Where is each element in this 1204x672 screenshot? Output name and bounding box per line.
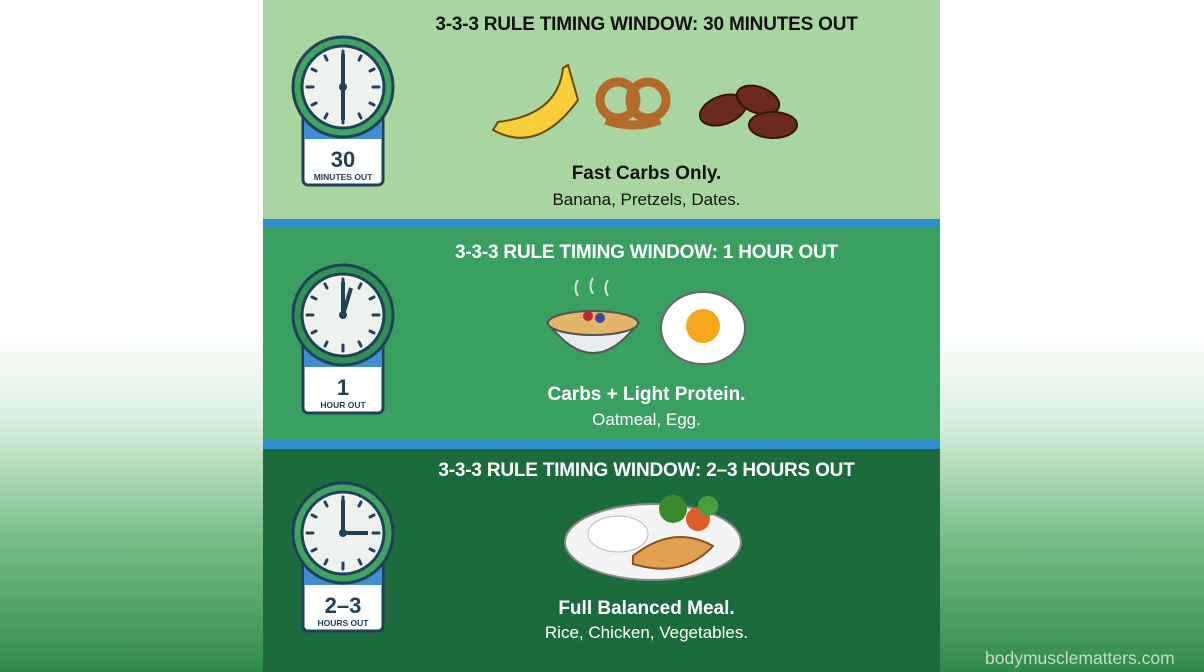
subtitle 3: Rice, Chicken, Vegetables. bbox=[545, 623, 748, 642]
clock icon 3: 2–3 bbox=[325, 593, 361, 618]
clock icon 3 bbox=[292, 482, 394, 632]
panel: 2-3 hours out bbox=[263, 449, 940, 672]
clock icon 1 bbox=[292, 36, 394, 186]
title 2: Carbs + Light Protein. bbox=[548, 384, 745, 405]
clock icon 3: HOURS OUT bbox=[318, 618, 369, 628]
clock icon 2: HOUR OUT bbox=[320, 400, 366, 410]
subtitle 2: Oatmeal, Egg. bbox=[592, 410, 701, 429]
heading 3: 3-3-3 RULE TIMING WINDOW: 2–3 HOURS OUT bbox=[438, 460, 855, 481]
heading 1: 3-3-3 RULE TIMING WINDOW: 30 MINUTES OUT bbox=[435, 14, 858, 35]
food icons: oatmeal, egg bbox=[546, 278, 746, 365]
food icons: banana, pretzels, dates bbox=[492, 64, 798, 139]
clock icon 2 bbox=[292, 264, 394, 414]
heading 2: 3-3-3 RULE TIMING WINDOW: 1 HOUR OUT bbox=[455, 242, 838, 263]
subtitle 1: Banana, Pretzels, Dates. bbox=[552, 190, 741, 209]
panel: 30 minutes out bbox=[263, 0, 940, 219]
food icon: plate meal bbox=[564, 495, 742, 581]
title 1: Fast Carbs Only. bbox=[572, 163, 721, 184]
clock icon 2: 1 bbox=[337, 375, 349, 400]
clock icon 1: 30 bbox=[331, 147, 355, 172]
clock icon 1: MINUTES OUT bbox=[314, 172, 373, 182]
watermark: bodymusclematters.com bbox=[985, 648, 1175, 668]
panel: 1 hour out bbox=[263, 228, 940, 440]
title 3: Full Balanced Meal. bbox=[558, 598, 735, 619]
